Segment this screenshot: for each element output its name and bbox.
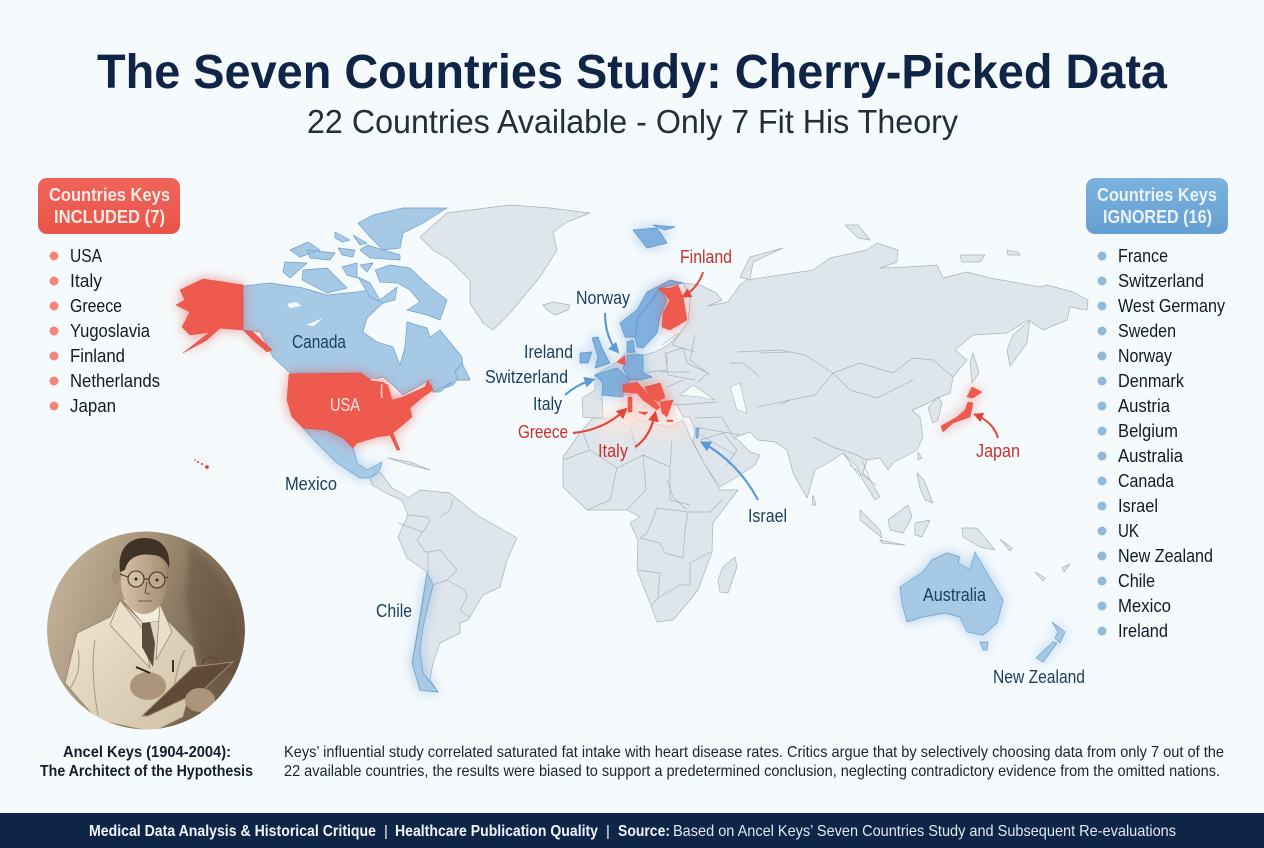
ignored countries: Australia and New Zealand	[900, 552, 1065, 662]
list: included	[50, 245, 160, 416]
land: Black Sea and Caspian	[680, 383, 747, 413]
list: included: Greece	[70, 295, 122, 316]
arrow: Japan	[976, 415, 998, 438]
list: ignored: Switzerland	[1118, 270, 1204, 291]
subtitle: 22 Countries Available - Only 7 Fit His Theory	[307, 103, 958, 140]
portrait caption: Ancel Keys (1904-2004):	[63, 744, 231, 761]
land: Greenland	[420, 205, 590, 330]
label: USA: USA	[330, 395, 360, 415]
list: included: Finland	[70, 345, 125, 366]
footer bar: |	[384, 823, 388, 840]
ignored countries: Mexico	[303, 428, 382, 478]
label: Canada: Canada	[292, 332, 347, 352]
arrow: Israel	[703, 443, 758, 500]
list: ignored: France	[1118, 245, 1168, 266]
list: ignored: Mexico	[1118, 595, 1171, 616]
footer bar: Medical Data Analysis & Historical Critique	[89, 823, 376, 840]
land: Iceland	[543, 302, 570, 315]
ignored countries: Europe	[580, 225, 699, 438]
heading: ignored: Countries Keys	[1097, 185, 1217, 205]
label: Japan: Japan	[976, 441, 1020, 461]
footer bar: Healthcare Publication Quality	[395, 823, 598, 840]
list: ignored: Norway	[1118, 345, 1173, 366]
list: ignored: Chile	[1118, 570, 1155, 591]
ignored countries: Chile	[412, 572, 438, 692]
sea glow: Mediterranean	[595, 400, 695, 436]
label: Switzerland: Switzerland	[485, 367, 568, 387]
list: included: Yugoslavia	[70, 320, 151, 341]
list: ignored: New Zealand	[1118, 545, 1213, 566]
land: Africa	[563, 418, 738, 622]
panel: ignored countries	[1086, 178, 1228, 641]
list: ignored: Austria	[1118, 395, 1171, 416]
arrow: Switzerland	[565, 380, 592, 395]
heading: included: Countries Keys	[49, 185, 170, 205]
label: Ireland: Ireland	[524, 342, 573, 362]
land: Madagascar	[718, 557, 737, 593]
included: Japan	[941, 387, 982, 432]
land: Novaya Zemlya	[740, 248, 783, 280]
list: ignored: Denmark	[1118, 370, 1185, 391]
list: ignored: Belgium	[1118, 420, 1178, 441]
portrait: Ancel Keys	[47, 532, 245, 732]
list: included: Italy	[70, 270, 103, 291]
list: included: Netherlands	[70, 370, 160, 391]
included: USA, Alaska and Hawaii	[176, 279, 433, 469]
list: ignored: UK	[1118, 520, 1140, 541]
footer bar: |	[606, 823, 610, 840]
label: Italy, red: Italy	[598, 441, 628, 461]
heading: ignored: IGNORED (16)	[1103, 207, 1212, 227]
heading: ignored	[1086, 178, 1228, 234]
label: Australia: Australia	[923, 585, 987, 605]
list: included: Japan	[70, 395, 116, 416]
footer bar	[0, 813, 1264, 848]
footer bar: Based on Ancel Keys’ Seven Countries Study and Subsequent Re-evaluations	[673, 823, 1176, 840]
label: Norway: Norway	[576, 288, 630, 308]
label: Israel: Israel	[748, 506, 787, 526]
title: The Seven Countries Study: Cherry-Picked Data	[97, 46, 1167, 99]
footer bar: Source:	[618, 823, 670, 840]
list: included: USA	[70, 245, 103, 266]
explanatory paragraph	[284, 744, 1224, 780]
panel: included countries	[38, 178, 180, 416]
land: Eurasia	[582, 243, 1088, 500]
label: New Zealand: New Zealand	[993, 667, 1085, 687]
ignored countries: Canada	[243, 208, 470, 395]
heading: included: INCLUDED (7)	[54, 207, 165, 227]
label: Italy, blue: Italy	[533, 394, 562, 414]
arrow: Italy	[635, 414, 655, 447]
list: ignored: Canada	[1118, 470, 1175, 491]
world map	[176, 205, 1088, 692]
label: Finland: Finland	[680, 247, 732, 267]
list: ignored: Ireland	[1118, 620, 1168, 641]
label: Mexico: Mexico	[285, 474, 337, 494]
label: Chile: Chile	[376, 601, 412, 621]
land: South and Central America	[370, 472, 517, 692]
label: Greece: Greece	[518, 422, 568, 442]
portrait caption: The Architect of the Hypothesis	[40, 763, 253, 780]
list: ignored: Australia	[1118, 445, 1184, 466]
list: ignored	[1098, 245, 1226, 641]
arrow: Norway	[605, 313, 617, 351]
portrait caption	[40, 744, 253, 780]
arrow: Greece	[573, 410, 625, 433]
list: ignored: West Germany	[1118, 295, 1226, 316]
heading: included	[38, 178, 180, 234]
included: Finland, Netherlands, Italy, Yugoslavia, Greece	[617, 285, 687, 422]
list: ignored: Sweden	[1118, 320, 1176, 341]
land: Asian and Pacific islands	[388, 225, 1070, 581]
list: ignored: Israel	[1118, 495, 1158, 516]
arrow: Finland	[684, 272, 703, 296]
